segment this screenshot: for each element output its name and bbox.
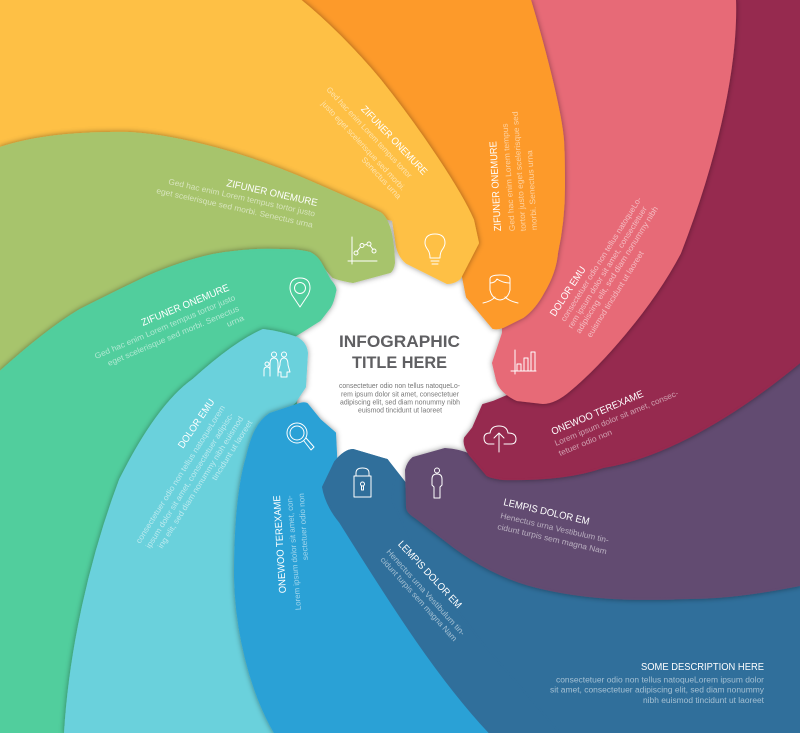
blade — [406, 300, 800, 599]
blade — [0, 133, 394, 380]
text block: tetuer odio non — [557, 428, 613, 458]
panel: cyan — [65, 330, 307, 733]
icon: padlock — [354, 468, 371, 497]
text block: consectetuer odio non tellus natoqueLorem — [134, 403, 227, 545]
text block: Senectus urna — [360, 155, 403, 201]
text block: cidunt turpis sem magna Nam — [497, 522, 608, 556]
panel: mint green — [0, 250, 335, 733]
panel: orange — [300, 0, 564, 328]
bottom right description: sit amet, consectetuer adipiscing elit, sed diam nonummy — [550, 686, 764, 694]
bottom right description — [550, 662, 765, 705]
bottom right description: consectetuer odio non tellus natoqueLorem ipsum dolor — [556, 676, 764, 684]
text block: LEMPIS DOLOR EM — [395, 539, 463, 611]
panel: maroon — [465, 0, 800, 479]
center description: euismod tincidunt ut laoreet — [358, 406, 443, 414]
title — [339, 333, 460, 372]
icon: light bulb — [425, 234, 445, 264]
panel: blue — [235, 403, 500, 733]
text block: adipiscing elit, sed diam nonummy nibh — [574, 205, 660, 335]
blade — [465, 0, 800, 479]
panel: pink — [493, 0, 735, 403]
icon: bar chart — [511, 350, 536, 374]
text block: Ged hac enim Lorem tempus tortor — [325, 85, 414, 180]
text block — [497, 497, 610, 556]
text block: urna — [225, 313, 246, 329]
text block: Ged hac enim Lorem tempus tortor justo — [168, 177, 317, 219]
text block: ONEWOO TEREXAME — [550, 389, 646, 438]
text block: ipsum dolor sit amet, consectetuer adipisc- — [144, 411, 236, 550]
text block: ZIFUNER ONEMURE — [225, 178, 319, 209]
icon: person — [432, 468, 442, 498]
title: INFOGRAPHIC — [339, 333, 460, 351]
text block: Lorem ipsum dolor sit amet, con- — [285, 495, 303, 611]
blade — [493, 0, 735, 403]
text block: eget scelerisque sed morbi. Senectus urna — [156, 186, 314, 230]
text block: Henectus urna Vestibulum tin- — [500, 511, 610, 545]
text block: tincidunt ut laoreet — [210, 418, 255, 482]
text block: morbi. Senectus urna — [525, 149, 539, 230]
text block: justo eget scelerisque sed morbi. — [319, 98, 407, 192]
text block: consectetuer odio non tellus natoqueLo- — [559, 195, 644, 323]
bottom right description: SOME DESCRIPTION HERE — [641, 662, 764, 673]
icon: magnifier — [287, 423, 314, 450]
text block: DOLOR EMU — [548, 265, 589, 319]
icon: cloud upload — [484, 426, 516, 452]
text block: eget scelerisque sed morbi. Senectus — [106, 304, 240, 368]
text block: sectetuer odio non — [297, 493, 310, 560]
text block: euismod tincidunt ut laoreet — [585, 249, 646, 339]
blade tip — [323, 450, 560, 733]
text block — [272, 493, 310, 611]
text block — [93, 283, 246, 368]
text block: Henectus urna Vestibulum tin- — [385, 547, 467, 638]
text block: DOLOR EMU — [176, 397, 217, 451]
text block — [319, 85, 429, 201]
bottom right description: nibh euismod tincidunt ut laoreet — [643, 696, 765, 705]
text block: Lorem ipsum dolor sit amet, consec- — [553, 389, 680, 448]
text block — [548, 195, 660, 339]
text block: ZIFUNER ONEMURE — [140, 283, 231, 329]
text block: ing elit, sed diam nonummy nibh euismod — [156, 415, 245, 550]
center description: rem ipsum dolor sit amet, consectetuer — [341, 390, 459, 398]
text block — [134, 397, 255, 550]
text block: Ged hac enim Lorem tempus — [500, 123, 517, 231]
text block: LEMPIS DOLOR EM — [502, 497, 591, 528]
blade — [0, 250, 335, 733]
text block: rem ipsum dolor sit amet, consectetuer — [566, 205, 649, 330]
blade — [300, 0, 564, 328]
blade — [0, 0, 478, 283]
text block: tortor justo eget scelerisque sed — [511, 111, 528, 231]
text block: ZIFUNER ONEMURE — [488, 141, 504, 231]
blade — [65, 330, 307, 733]
text block: ZIFUNER ONEMURE — [358, 104, 429, 178]
icon: man — [483, 275, 518, 303]
panel: dark blue blade base — [323, 450, 800, 733]
icon: map pin — [290, 278, 310, 307]
center description — [339, 381, 460, 414]
center description: adipiscing elit, sed diam nonummy nibh — [340, 398, 460, 406]
center description: consectetuer odio non tellus natoqueLo- — [339, 381, 460, 390]
text block: cidunt turpis sem magna Nam — [379, 555, 459, 643]
text block: ONEWOO TEREXAME — [272, 495, 289, 593]
panel: olive green — [0, 133, 394, 380]
icon: family — [264, 352, 290, 377]
panel: dark blue tip and content — [323, 450, 560, 733]
blade — [235, 403, 500, 733]
icon: line chart — [348, 237, 377, 264]
text block — [488, 111, 539, 231]
panel: purple — [406, 300, 800, 599]
panel: yellow — [0, 0, 478, 283]
text block: Ged hac enim Lorem tempus tortor justo — [93, 293, 237, 361]
title: TITLE HERE — [352, 354, 447, 372]
